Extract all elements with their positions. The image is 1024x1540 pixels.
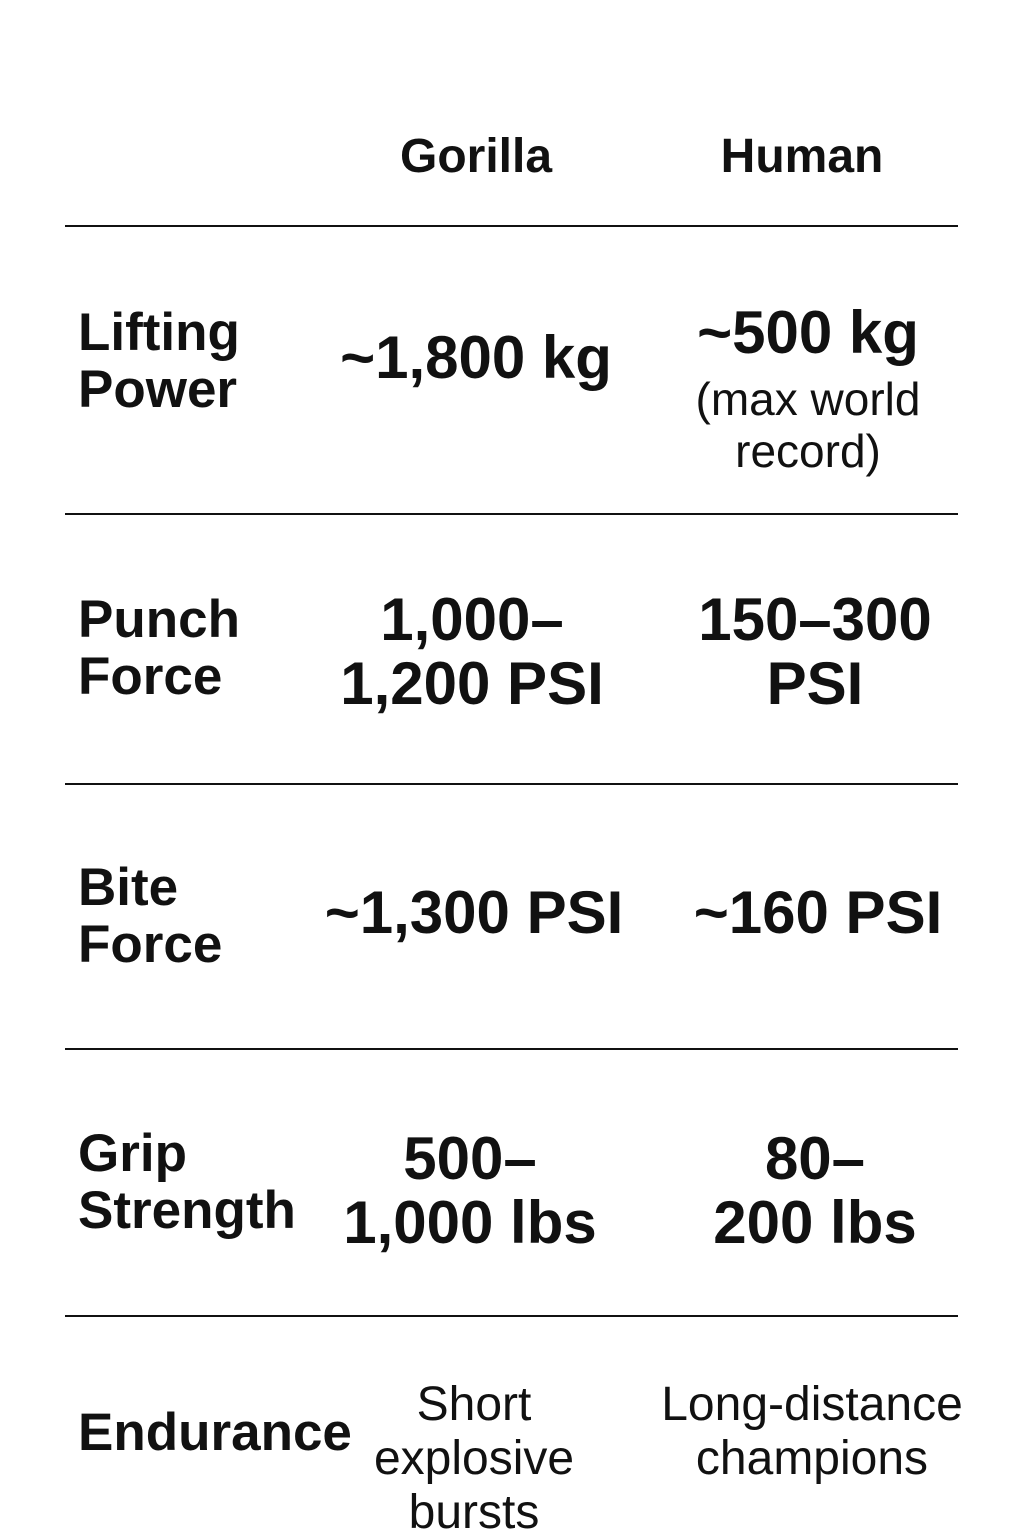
row label: Punch Force — [78, 590, 240, 706]
value: gorilla bite: ~1,300 PSI — [325, 879, 623, 946]
row label: Grip Strength: Strength — [78, 1181, 296, 1240]
value: gorilla endurance: Short — [417, 1378, 531, 1431]
row label: Lifting Power: Lifting — [78, 303, 240, 362]
value: human endurance: champions — [696, 1432, 928, 1485]
row label: Grip Strength — [78, 1124, 296, 1240]
value: human endurance — [661, 1378, 963, 1485]
value: gorilla endurance: explosive — [374, 1432, 574, 1485]
value: gorilla grip: 1,000 lbs — [343, 1189, 597, 1256]
value: gorilla punch: 1,200 PSI — [340, 650, 604, 717]
row label: Punch Force: Force — [78, 647, 222, 706]
row label: Bite Force: Bite — [78, 858, 178, 917]
value: human lifting: (max world — [696, 373, 920, 425]
value: human lifting — [696, 299, 920, 477]
value: gorilla lifting: ~1,800 kg — [340, 324, 612, 391]
value: human lifting: record) — [735, 425, 881, 477]
row label: Punch Force: Punch — [78, 590, 240, 649]
value: human punch: PSI — [767, 650, 863, 717]
row label: Grip Strength: Grip — [78, 1124, 187, 1183]
value: gorilla punch — [340, 586, 604, 717]
row label: Lifting Power: Power — [78, 360, 237, 419]
row label: Endurance: Endurance — [78, 1403, 352, 1462]
value: gorilla endurance: bursts — [409, 1486, 539, 1539]
value: gorilla grip — [343, 1125, 597, 1256]
row label: Lifting Power — [78, 303, 240, 419]
value: human grip: 200 lbs — [713, 1189, 917, 1256]
value: human grip — [713, 1125, 917, 1256]
value: human punch: 150–300 — [698, 586, 932, 653]
value: gorilla grip: 500– — [403, 1125, 537, 1192]
value: human endurance: Long-distance — [661, 1378, 963, 1431]
value: gorilla endurance — [374, 1378, 574, 1539]
header: Gorilla: Gorilla — [400, 130, 552, 183]
row label: Bite Force: Force — [78, 915, 222, 974]
value: human punch — [698, 586, 932, 717]
value: human bite: ~160 PSI — [694, 879, 942, 946]
value: gorilla punch: 1,000– — [380, 586, 564, 653]
value: human lifting: ~500 kg — [697, 299, 919, 366]
row label: Bite Force — [78, 858, 222, 974]
value: human grip: 80– — [765, 1125, 865, 1192]
header: Human: Human — [721, 130, 883, 183]
